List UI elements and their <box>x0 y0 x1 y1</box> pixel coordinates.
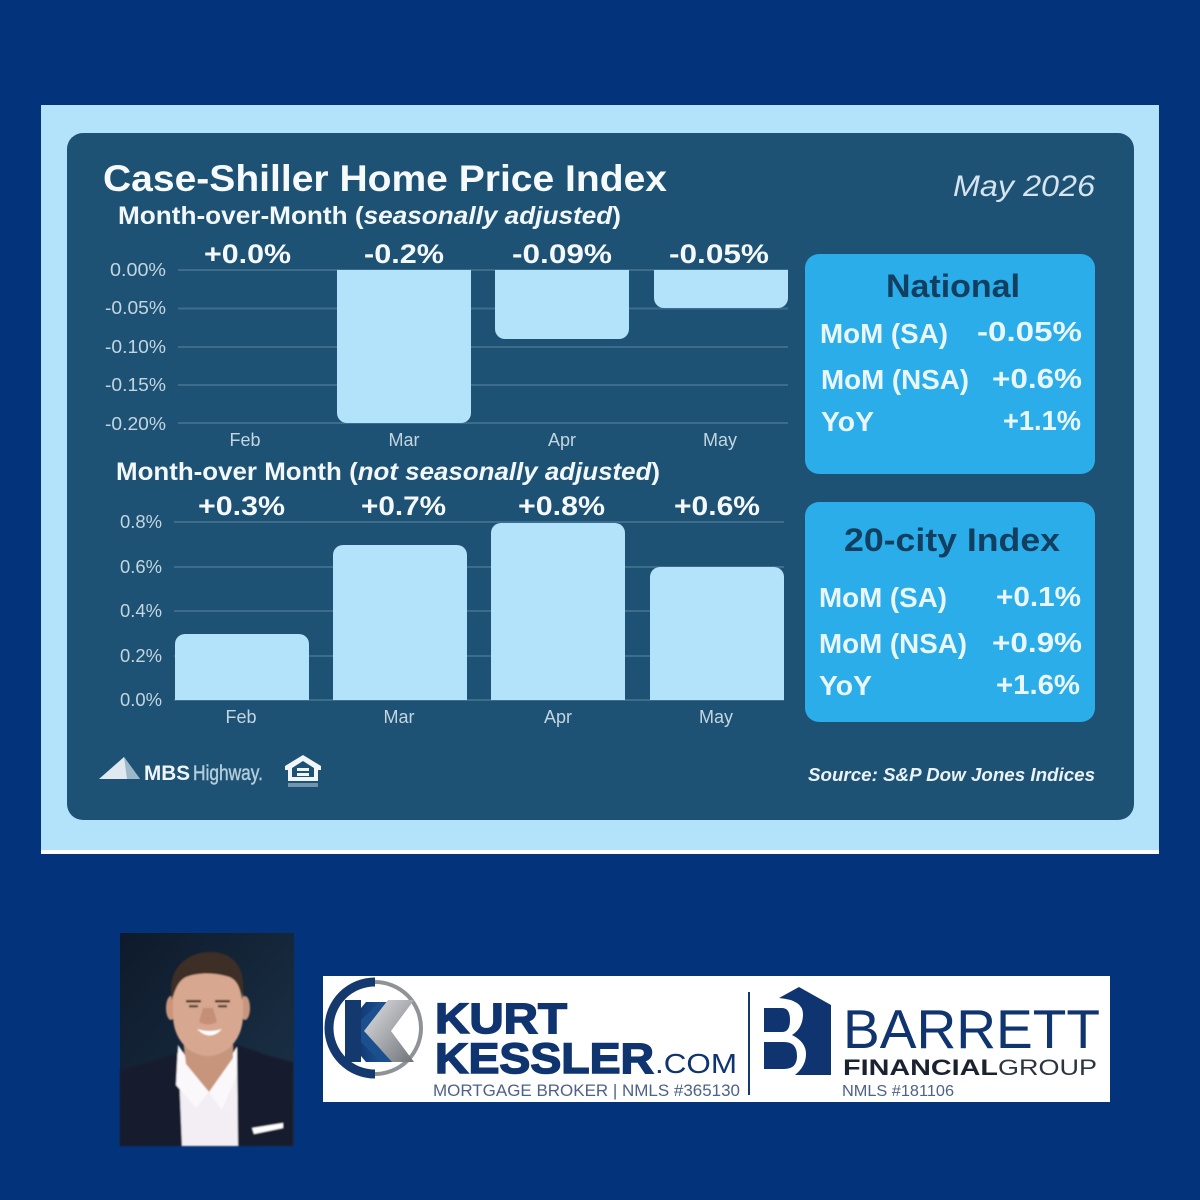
pocket square <box>252 1123 283 1134</box>
infographic card <box>41 105 1159 854</box>
chart: month-over-month not seasonally adjusted: +0.6% <box>674 491 760 521</box>
hair <box>171 952 243 1000</box>
text: Barrett: BARRETT <box>843 998 1100 1060</box>
nose and features <box>199 1008 217 1024</box>
text: Financial Group: FINANCIAL <box>843 1055 998 1080</box>
panel: 20-city Index: +0.1% <box>996 581 1081 612</box>
logo: MBS Highway: Highway. <box>193 762 263 785</box>
chart: month-over-month not seasonally adjusted: Feb <box>225 707 257 727</box>
icon: equal housing <box>285 755 321 787</box>
chart: month-over-month not seasonally adjusted: +0.8% <box>518 491 605 521</box>
chart: month-over-month not seasonally adjusted: 0.4% <box>120 601 162 621</box>
panel: 20-city Index: MoM (NSA) <box>819 628 967 659</box>
logo: Kurt Kessler emblem <box>329 982 421 1074</box>
chart: month-over-month not seasonally adjusted: +0.7% <box>361 491 446 521</box>
source note: Source: S&P Dow Jones Indices <box>808 765 1095 785</box>
photo: portrait <box>120 933 294 1146</box>
chart: month-over-month seasonally adjusted: Mar <box>388 430 420 450</box>
neck <box>183 1040 233 1092</box>
ears <box>166 996 176 1020</box>
text: Kurt Kessler <box>435 995 737 1083</box>
chart: month-over-month not seasonally adjusted: May <box>699 707 733 727</box>
panel: National: YoY <box>821 406 874 437</box>
panel: 20-city Index: +0.9% <box>992 627 1082 658</box>
chart: month-over-month seasonally adjusted <box>105 239 788 450</box>
chart: month-over-month seasonally adjusted: -0.15% <box>105 375 166 395</box>
date: May 2026 <box>953 170 1095 203</box>
chart: month-over-month seasonally adjusted: -0.05% <box>105 298 166 318</box>
panel: National <box>805 254 1095 474</box>
panel: 20-city Index: YoY <box>819 670 872 701</box>
logo: Barrett emblem <box>764 987 831 1075</box>
panel: 20-city Index: 20-city Index <box>844 522 1060 558</box>
chart: month-over-month seasonally adjusted: +0.0% <box>204 239 291 269</box>
chart: month-over-month seasonally adjusted: Apr <box>548 430 576 450</box>
chart: month-over-month seasonally adjusted: Feb <box>229 430 261 450</box>
text: Kurt Kessler: KURT <box>435 995 567 1043</box>
heading: seasonally adjusted chart: Month-over-Month ( seasonally adjusted ) <box>118 202 621 230</box>
chart: month-over-month seasonally adjusted: -0.09% <box>512 239 612 269</box>
panel: 20-city Index: MoM (SA) <box>819 582 947 613</box>
chart: month-over-month seasonally adjusted: May <box>703 430 737 450</box>
text: Kurt Kessler: KESSLER <box>435 1035 654 1083</box>
text: Kurt Kessler: .COM <box>655 1048 737 1079</box>
chart: month-over-month seasonally adjusted: -0.20% <box>105 414 166 434</box>
jacket <box>120 1045 293 1146</box>
logo: MBS Highway <box>99 757 263 785</box>
text: mortgage broker NMLS: MORTGAGE BROKER | NMLS #365130 <box>433 1081 740 1100</box>
panel: National: -0.05% <box>977 316 1082 347</box>
chart: month-over-month seasonally adjusted: -0.10% <box>105 337 166 357</box>
chart: month-over-month not seasonally adjusted: 0.6% <box>120 557 162 577</box>
chart: month-over-month not seasonally adjusted: Apr <box>544 707 572 727</box>
panel: National: National <box>886 268 1020 304</box>
panel: National: +0.6% <box>992 363 1082 394</box>
chart: month-over-month not seasonally adjusted: 0.8% <box>120 512 162 532</box>
divider <box>748 992 750 1095</box>
text: Financial Group: GROUP <box>998 1055 1097 1080</box>
shirt <box>178 1045 238 1146</box>
panel: National: +1.1% <box>1003 405 1081 436</box>
chart: month-over-month seasonally adjusted: -0.05% <box>669 239 769 269</box>
chart: month-over-month seasonally adjusted: -0.2% <box>364 239 444 269</box>
panel: National: MoM (SA) <box>820 318 948 349</box>
panel: 20-city Index <box>805 502 1095 722</box>
title: Case-Shiller Home Price Index <box>103 158 667 199</box>
heading: not seasonally adjusted chart: Month-over Month ( not seasonally adjusted ) <box>116 458 660 486</box>
text: Barrett NMLS: NMLS #181106 <box>842 1083 954 1100</box>
chart: month-over-month not seasonally adjusted <box>120 491 784 727</box>
face <box>173 968 243 1056</box>
logo: MBS Highway: MBS <box>144 762 190 785</box>
logo banner <box>323 976 1110 1102</box>
chart: month-over-month not seasonally adjusted: +0.3% <box>198 491 285 521</box>
chart: month-over-month not seasonally adjusted: Mar <box>384 707 415 727</box>
panel: 20-city Index: +1.6% <box>996 669 1080 700</box>
panel: National: MoM (NSA) <box>821 364 969 395</box>
chart: month-over-month seasonally adjusted: 0.00% <box>110 260 166 280</box>
text: Financial Group <box>843 1055 1097 1080</box>
chart: month-over-month not seasonally adjusted: 0.2% <box>120 646 162 666</box>
chart: month-over-month not seasonally adjusted: 0.0% <box>120 690 162 710</box>
